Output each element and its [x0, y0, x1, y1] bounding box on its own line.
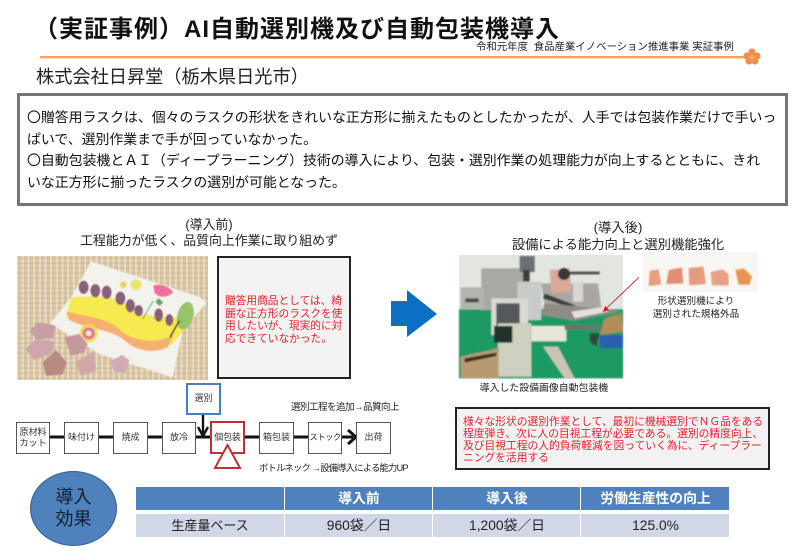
value: before: 960袋／日	[327, 518, 391, 533]
value: before	[284, 514, 433, 537]
step: baking: 焼成	[121, 432, 140, 442]
badge: introduction effect: 導入	[56, 487, 92, 507]
summary text: 〇自動包装機とＡＩ（ディープラーニング）技術の導入により、包装・選別作業の処理能力が向上するとともに、きれ	[27, 152, 760, 168]
summary text: 〇贈答用ラスクは、個々のラスクの形状をきれいな正方形に揃えたものとしたかったが、人手では包装作業だけで手いっ	[27, 109, 776, 125]
before note text: 応できていなかった。	[225, 332, 332, 344]
connector lines	[50, 415, 356, 446]
step: stock: ストック	[309, 432, 341, 442]
before note text: 贈答用商品としては、綺	[225, 295, 342, 307]
photo: rusk package on mat	[17, 256, 208, 380]
heading: before introduction	[80, 217, 338, 248]
step: seasoning: 味付け	[68, 432, 95, 442]
heading: after introduction: (導入後)	[594, 220, 642, 235]
results table	[136, 487, 729, 537]
header: before	[284, 487, 433, 510]
badge: introduction effect: 効果	[56, 509, 92, 529]
after note text	[463, 416, 763, 464]
value: after	[432, 514, 581, 537]
table header	[136, 487, 729, 510]
after note text: 及び目視工程の人的負荷軽減を図っていく為に、ディープラー	[463, 440, 762, 452]
step: individual packaging: 個包装	[214, 432, 241, 442]
before note text	[225, 294, 342, 344]
value: after: 1,200袋／日	[469, 518, 545, 533]
badge: introduction effect	[30, 471, 117, 546]
arrow: before to after	[391, 290, 437, 337]
caption: packaging machine: 導入した設備画像自動包装機	[480, 383, 608, 394]
after note text: ニングを活用する	[463, 452, 549, 464]
step: raw material cut: カット	[20, 438, 46, 448]
icon: bottleneck triangle	[213, 443, 242, 469]
summary text: いな正方形に揃ったラスクの選別が可能となった。	[27, 174, 346, 190]
header: productivity: 労働生産性の向上	[600, 491, 711, 506]
step: cooling	[162, 422, 196, 454]
step: shipping	[356, 422, 391, 454]
step: shipping: 出荷	[364, 432, 382, 442]
header: after: 導入後	[486, 491, 528, 506]
panel: after note	[455, 407, 770, 470]
company name: 株式会社日昇堂（栃木県日光市）	[36, 67, 309, 87]
step: stock	[308, 422, 342, 454]
step: raw material cut	[16, 422, 50, 454]
after note text: 程度弾き、次に人の目視工程が必要である。選別の精度向上、	[463, 428, 763, 440]
header: after	[432, 487, 581, 510]
table row	[136, 514, 729, 537]
process flow	[16, 383, 391, 469]
value: productivity	[580, 514, 730, 537]
before note text: 用したいが、現実的に対	[225, 320, 342, 332]
heading: before introduction: 工程能力が低く、品質向上作業に取り組めず	[80, 233, 338, 248]
note: quality improvement: 選別工程を追加→品質向上	[291, 402, 399, 413]
caption: rejected products	[653, 296, 739, 320]
step: box packaging	[259, 422, 294, 454]
red pointer arrow	[605, 277, 639, 309]
step: box packaging: 箱包装	[263, 432, 290, 442]
panel: summary	[17, 93, 788, 206]
step: individual packaging	[210, 421, 245, 454]
row label: 生産量ベース	[171, 518, 249, 533]
value: productivity: 125.0%	[632, 518, 679, 533]
summary text: ぱいで、選別作業まで手が回っていなかった。	[27, 131, 317, 147]
after note text: 様々な形状の選別作業として、最初に機械選別でＮＧ品をある	[463, 416, 763, 428]
panel: before note	[217, 256, 351, 379]
heading: after introduction	[512, 220, 724, 252]
heading: after introduction: 設備による能力向上と選別機能強化	[512, 236, 724, 252]
note: bottleneck: ボトルネック →設備導入による能力UP	[259, 463, 408, 473]
summary text	[27, 109, 776, 190]
step: raw material cut: 原材料	[20, 426, 46, 436]
step: baking	[113, 422, 148, 454]
snack photo	[643, 252, 758, 292]
step: sorting	[186, 383, 221, 415]
step: cooling: 放冷	[170, 432, 188, 442]
header: before: 導入前	[338, 491, 380, 506]
title: （実証事例）AI自動選別機及び自動包装機導入	[34, 16, 560, 43]
photo: automatic packaging machine	[458, 252, 758, 380]
step: seasoning	[64, 422, 99, 454]
header rule with flower icon	[40, 48, 761, 65]
step: sorting: 選別	[194, 393, 212, 403]
before note text: 麗な正方形のラスクを使	[225, 308, 342, 320]
caption: rejected products: 形状選別機により	[658, 296, 734, 307]
caption: rejected products: 選別された規格外品	[653, 308, 739, 320]
header: productivity	[580, 487, 730, 510]
subtitle: program name: 令和元年度 食品産業イノベーション推進事業 実証事例	[476, 42, 734, 53]
heading: before introduction: (導入前)	[185, 217, 233, 232]
